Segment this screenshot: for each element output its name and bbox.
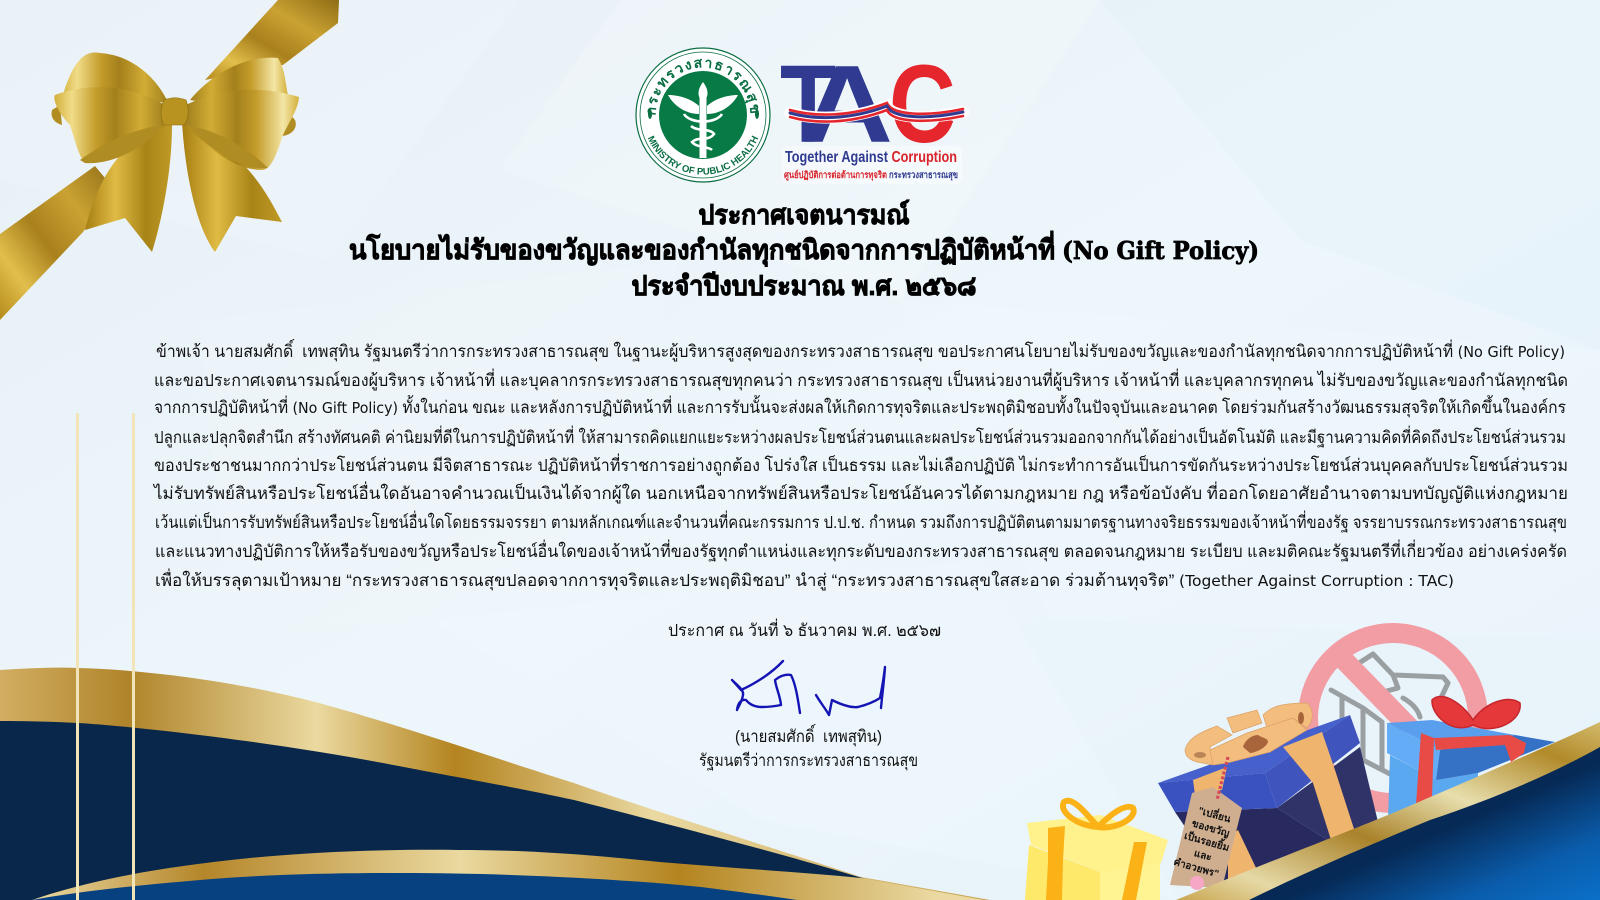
icon: large navy gift box with orange ribbon [1158, 703, 1378, 890]
signature [732, 661, 885, 715]
icon: light blue gift box with red ribbon [1387, 697, 1555, 822]
body text: ไม่รับทรัพย์สินหรือประโยชน์อื่นใดอันอาจคำนวณเป็นเงินได้จากผู้ใด นอกเหนือจากทรัพย์สินหรือประโยชน์อันควรได้ตามกฎหมาย กฎ หรือข้อบังคับ ที่ออกโดยอาศัยอำนาจตามบทบัญญัติแห่งกฎหมาย [152, 481, 1568, 504]
thai flag ribbon [790, 103, 963, 122]
title [349, 199, 1259, 301]
vertical gold lines [76, 413, 135, 900]
signatory name and position [699, 724, 918, 771]
body text: ข้าพเจ้า นายสมศักดิ์ เทพสุทิน รัฐมนตรีว่าการกระทรวงสาธารณสุข ในฐานะผู้บริหารสูงสุดของกระทรวงสาธารณสุข ขอประกาศนโยบายไม่รับของขวัญและของกำนัลทุกชนิดจากการปฏิบัติหน้าที่ (No Gift Policy) [156, 339, 1565, 362]
logo: TAC Together Against Corruption: T [780, 42, 836, 166]
title: นโยบายไม่รับของขวัญและของกำนัลทุกชนิดจากการปฏิบัติหน้าที่ (No Gift Policy) [349, 230, 1259, 267]
icon: caduceus [668, 82, 738, 158]
gift tag: ของขวัญ [1190, 817, 1231, 840]
body text: และขอประกาศเจตนารมณ์ของผู้บริหาร เจ้าหน้าที่ และบุคลากรกระทรวงสาธารณสุขทุกคนว่า กระทรวงสาธารณสุข เป็นหน่วยงานที่ผู้บริหาร เจ้าหน้าที่ และบุคลากรทุกคน ไม่รับของขวัญและของกำนัลทุกชนิด [154, 368, 1568, 391]
signatory name and position: (นายสมศักดิ์ เทพสุทิน) [735, 724, 882, 747]
title: ประกาศเจตนารมณ์ [698, 199, 910, 230]
logo: TAC Together Against Corruption: Together Against Corruption [785, 149, 957, 166]
body text [152, 339, 1568, 591]
gift tag: เป็นรอยยิ้ม [1183, 828, 1231, 854]
gift tag: คำอวยพร" [1172, 856, 1220, 880]
logo: Ministry of Public Health seal [635, 47, 771, 183]
icon: gold ribbon bow [0, 0, 339, 320]
gift bow [1185, 703, 1312, 765]
bottom-left navy wave with gold band [0, 668, 990, 900]
logo: TAC Together Against Corruption: A [801, 43, 893, 166]
logo: Ministry of Public Health seal: กระทรวงสาธารณสุข [648, 58, 759, 115]
gift tag: "เปลี่ยน [1197, 803, 1233, 825]
logo: TAC Together Against Corruption: ศูนย์ปฏิบัติการต่อต้านการทุจริต กระทรวงสาธารณสุข [784, 169, 958, 182]
body text: เพื่อให้บรรลุตามเป้าหมาย “กระทรวงสาธารณสุขปลอดจากการทุจริตและประพฤติมิชอบ” นำสู่ “กระทรวงสาธารณสุขใสสะอาด ร่วมต้านทุจริต” (Together Against Corruption : TAC) [155, 568, 1454, 591]
logo: TAC Together Against Corruption [780, 42, 963, 184]
date line: ประกาศ ณ วันที่ ๖ ธันวาคม พ.ศ. ๒๕๖๗ [668, 618, 941, 640]
title: ประจำปีงบประมาณ พ.ศ. ๒๕๖๘ [632, 271, 976, 301]
logo: Ministry of Public Health seal: MINISTRY OF PUBLIC HEALTH [648, 136, 758, 175]
gift tag [1170, 757, 1242, 890]
icon: yellow gift box with orange ribbon [1025, 801, 1168, 900]
body text: และแนวทางปฏิบัติการให้หรือรับของขวัญหรือประโยชน์อื่นใดของเจ้าหน้าที่ของรัฐทุกตำแหน่งและทุกระดับของกระทรวงสาธารณสุข ตลอดจนกฎหมาย ระเบียบ และมติคณะรัฐมนตรีที่เกี่ยวข้อง อย่างเคร่งครัด [155, 539, 1567, 562]
icon: prohibition sign over gift [1308, 633, 1478, 803]
bottom-right gold swoosh with blue wave [1176, 722, 1600, 900]
gift tag: และ [1193, 848, 1213, 864]
signatory name and position: รัฐมนตรีว่าการกระทรวงสาธารณสุข [699, 751, 918, 771]
logo: TAC Together Against Corruption: C [889, 42, 956, 166]
